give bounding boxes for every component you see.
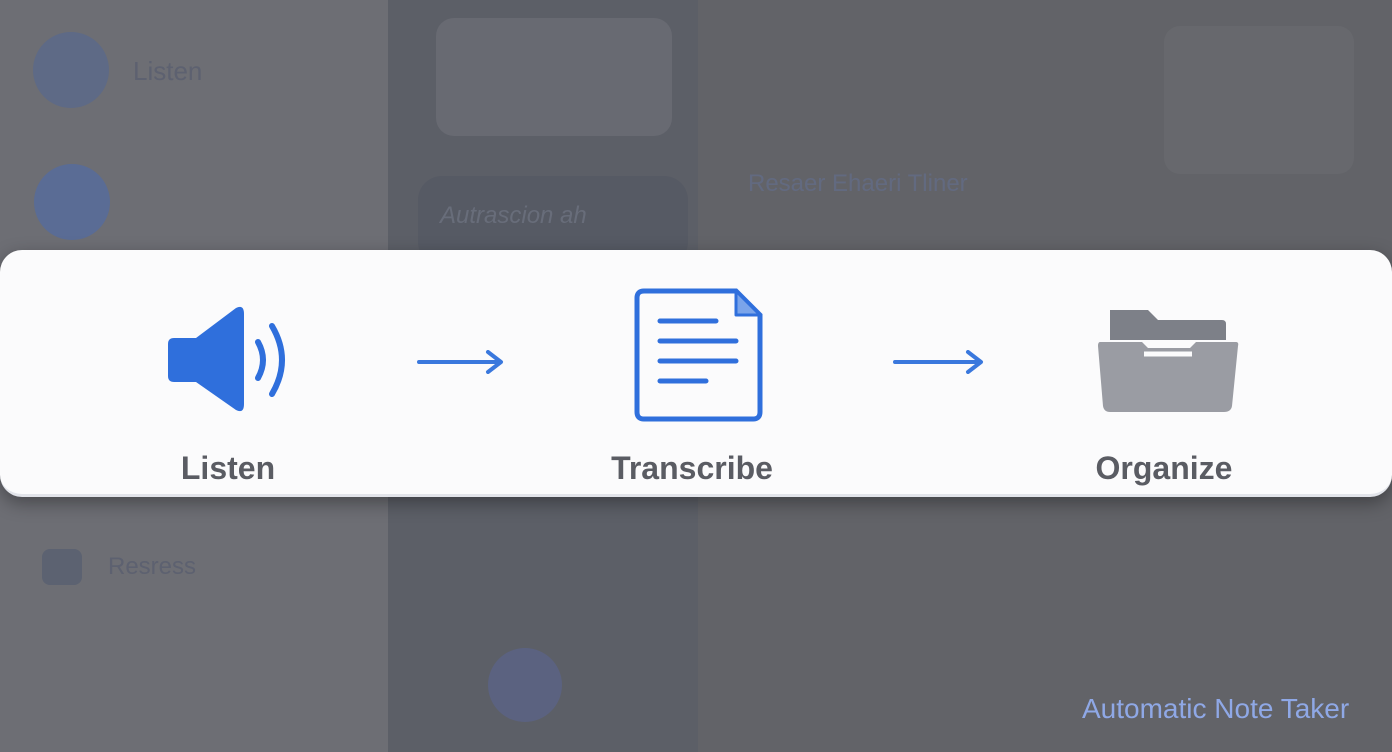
faded button [418, 176, 688, 266]
arrow 2 [893, 350, 984, 374]
background: left sidebar [0, 0, 388, 752]
icon: document [634, 288, 762, 422]
faded sidebar item: listen [33, 32, 202, 108]
footer brand text: Automatic Note Taker [1082, 693, 1349, 724]
background: middle column [388, 0, 698, 752]
faded sidebar icon [34, 164, 110, 240]
faded sidebar item: listen: Listen [133, 56, 202, 86]
faded sidebar item: resress [42, 549, 196, 585]
background: right area [698, 0, 1392, 752]
faded round button [488, 648, 562, 722]
faded link text: Resaer Ehaeri Tliner [748, 170, 968, 197]
label: Transcribe: Transcribe [611, 450, 773, 486]
main process card [0, 250, 1392, 497]
faded sidebar item: resress: Resress [108, 553, 196, 580]
icon: speaker [168, 306, 285, 412]
label: Organize: Organize [1096, 450, 1232, 486]
icon: folder [1098, 310, 1238, 412]
faded card top middle [436, 18, 672, 136]
label: Listen: Listen [181, 450, 275, 486]
arrow 1 [417, 350, 504, 374]
faded right card [1164, 26, 1354, 174]
faded button: Autrascion ah [440, 202, 587, 229]
